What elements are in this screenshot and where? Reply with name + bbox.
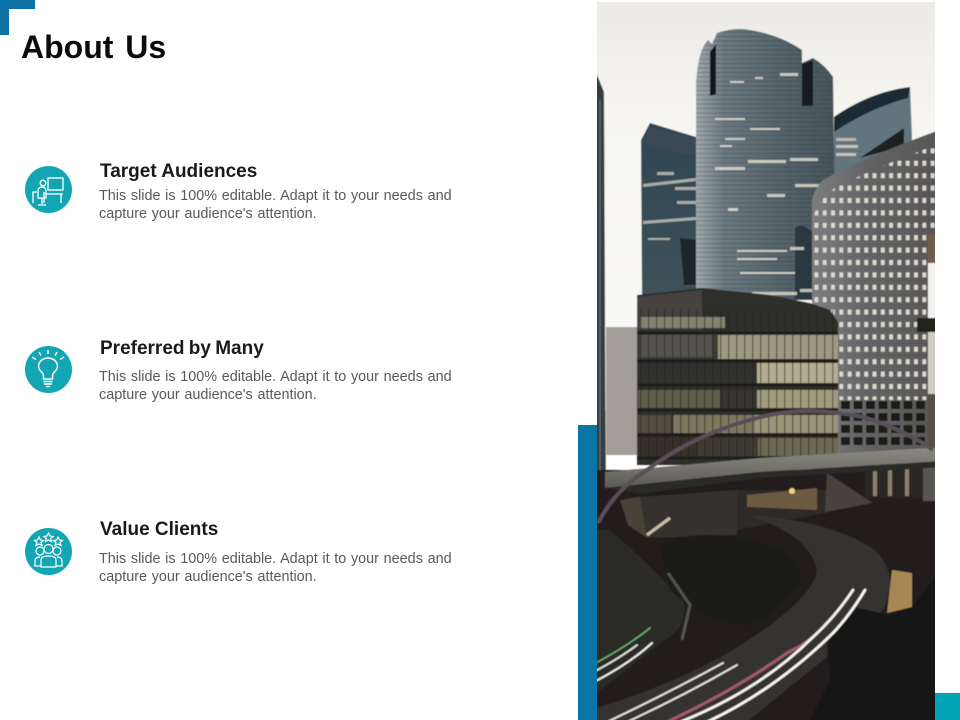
sky (585, 0, 950, 410)
teal accent block (935, 693, 960, 720)
concrete streak (647, 518, 670, 535)
text block: This slide is 100% editable. Adapt it to your needs and (99, 551, 452, 567)
building: pale low block (606, 327, 637, 455)
text block: This slide is 100% editable. Adapt it to your needs and (99, 369, 452, 385)
text block: This slide is 100% editable. Adapt it to your needs and (99, 188, 452, 204)
heading: Value Clients (100, 519, 218, 540)
blue accent bar (578, 425, 597, 720)
road markings (668, 573, 690, 640)
underpass concrete (620, 473, 873, 538)
text block (99, 188, 452, 222)
tree clump centre (667, 535, 719, 604)
panel: target audiences (25, 161, 452, 222)
title: About Us (21, 29, 166, 65)
photo: city skyscrapers and highway (597, 2, 935, 720)
icon: light bulb (25, 346, 72, 393)
panel: value clients (25, 519, 452, 585)
light trails (590, 590, 865, 720)
heading: Target Audiences (100, 161, 257, 182)
left road (597, 530, 684, 692)
building: round grey block with windows (812, 128, 945, 470)
bridge deck (605, 447, 945, 494)
heading: Preferred by Many (100, 338, 264, 359)
building: far left edge tower (597, 74, 607, 471)
corner bracket (0, 0, 35, 35)
icon: group with stars (25, 528, 72, 575)
lit wall patch (887, 570, 912, 613)
building: glass office block (637, 288, 838, 465)
ground: dark landscape (585, 470, 950, 720)
building: back right tower (833, 86, 913, 175)
building: main curved tower (696, 29, 836, 300)
building: dark left tower (641, 123, 696, 296)
text block: capture your audience's attention. (99, 206, 317, 222)
text block: capture your audience's attention. (99, 387, 317, 403)
colonnade under bridge (866, 468, 935, 502)
text block (99, 551, 452, 585)
bridge arch (598, 411, 933, 523)
text block (99, 369, 452, 403)
main curved road (590, 515, 890, 720)
icon: person at desk (25, 166, 72, 213)
street lamp glow (789, 488, 795, 494)
text block: capture your audience's attention. (99, 569, 317, 585)
trees bottom right (810, 578, 935, 720)
panel: preferred by many (25, 338, 452, 403)
